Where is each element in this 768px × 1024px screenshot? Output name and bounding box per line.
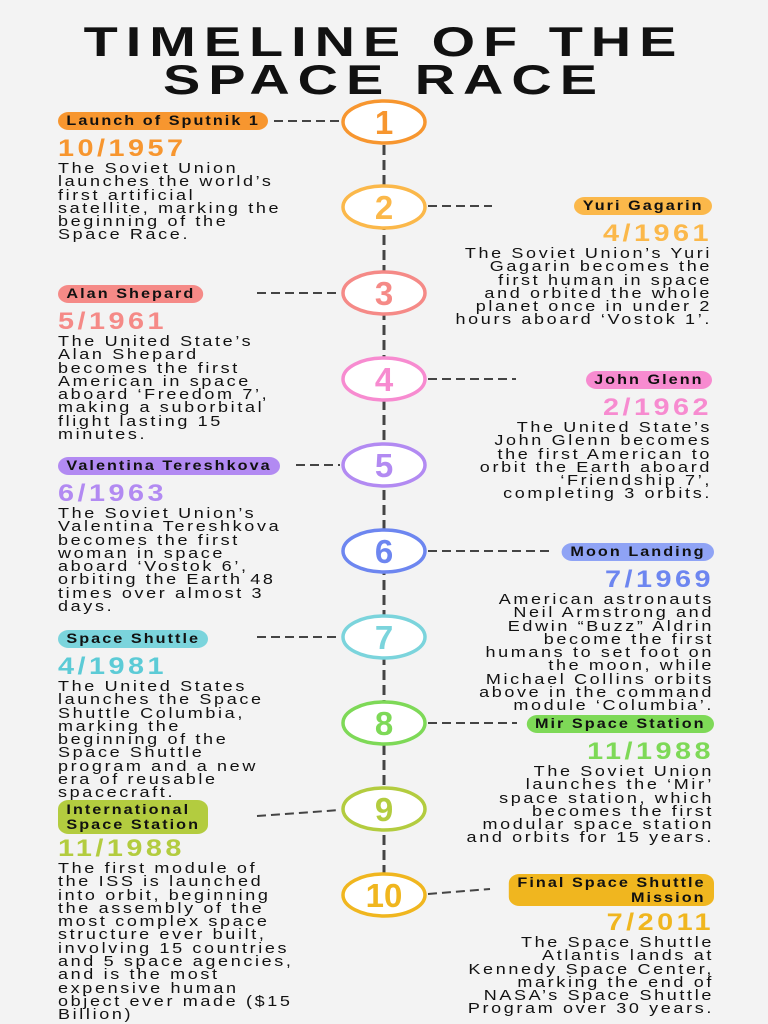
event 10: Kennedy Space Center,: [468, 961, 714, 978]
circles: 5: [375, 447, 393, 484]
event 7: beginning of the: [58, 731, 228, 748]
event 5: Valentina Tereshkova: [58, 518, 281, 535]
event 5: times over almost 3: [58, 585, 264, 602]
event 9: and is the most: [58, 966, 220, 983]
event 1: satellite, marking the: [58, 200, 281, 217]
event 9: most complex space: [58, 913, 270, 930]
circles: 9: [375, 791, 393, 828]
event 3: [58, 285, 269, 443]
event 8: space station, which: [499, 790, 714, 807]
event 4: completing 3 orbits.: [503, 485, 712, 502]
event 7: marking the: [58, 718, 181, 735]
event 9: and 5 space agencies,: [58, 953, 294, 970]
event 2: Gagarin becomes the: [490, 258, 712, 275]
event 6: become the first: [544, 631, 714, 648]
event 9: The first module of: [58, 860, 257, 877]
event 7: Shuttle Columbia,: [58, 705, 245, 722]
event 9: Billion): [58, 1006, 133, 1023]
event 2: 4/1961: [603, 220, 712, 247]
circles: 10: [366, 877, 402, 914]
event 10: marking the end of: [517, 974, 714, 991]
event 4: The United State’s: [517, 419, 712, 436]
event 6: Moon Landing: [570, 544, 706, 559]
event 2: hours aboard ‘Vostok 1’.: [456, 311, 712, 328]
event 10: Atlantis lands at: [542, 947, 714, 964]
event 6: above in the command: [479, 684, 714, 701]
event 1: Space Race.: [58, 226, 190, 243]
circles: [343, 101, 425, 916]
event 1: beginning of the: [58, 213, 228, 230]
event 4: the first American to: [497, 446, 712, 463]
circles: 2: [375, 189, 393, 226]
event 5: The Soviet Union’s: [58, 505, 256, 522]
event 2: Yuri Gagarin: [583, 198, 704, 213]
event 8: The Soviet Union: [534, 763, 714, 780]
event 4: John Glenn becomes: [494, 432, 712, 449]
event 9: International: [66, 802, 190, 817]
event 6: [479, 543, 714, 714]
event 3: Alan Shepard: [66, 286, 195, 301]
event 9: Space Station: [66, 817, 200, 832]
event 5: orbiting the Earth 48: [58, 571, 276, 588]
event 3: 5/1961: [58, 308, 167, 335]
event 7: spacecraft.: [58, 784, 175, 801]
circles: 4: [375, 361, 394, 398]
event 6: American astronauts: [499, 591, 714, 608]
event 9: involving 15 countries: [58, 940, 289, 957]
event 7: program and a new: [58, 758, 258, 775]
event 5: woman in space: [58, 545, 225, 562]
event 9: the assembly of the: [58, 900, 264, 917]
event 8: Mir Space Station: [535, 716, 706, 731]
event 1: Launch of Sputnik 1: [66, 113, 260, 128]
event 6: humans to set foot on: [485, 644, 714, 661]
event 3: minutes.: [58, 426, 147, 443]
event 2: The Soviet Union’s Yuri: [465, 245, 712, 262]
circles: 8: [375, 705, 393, 742]
event 10: Program over 30 years.: [468, 1000, 714, 1017]
event 5: days.: [58, 598, 114, 615]
event 3: American in space: [58, 373, 251, 390]
event 9: structure ever built,: [58, 926, 267, 943]
event 4: ‘Friendship 7’,: [560, 472, 712, 489]
title: TIMELINE OF THE: [84, 18, 684, 65]
event 1: [58, 112, 281, 243]
event 6: Neil Armstrong and: [513, 604, 714, 621]
event 9: expensive human: [58, 980, 239, 997]
event 7: Space Shuttle: [58, 744, 204, 761]
event 1: The Soviet Union: [58, 160, 238, 177]
event 4: orbit the Earth aboard: [480, 459, 712, 476]
event 7: launches the Space: [58, 691, 264, 708]
event 3: Alan Shepard: [58, 346, 199, 363]
event 7: era of reusable: [58, 771, 218, 788]
event 4: John Glenn: [594, 372, 704, 387]
event 7: Space Shuttle: [66, 631, 200, 646]
event 9: object ever made ($15: [58, 993, 293, 1010]
event 10: Mission: [631, 890, 706, 905]
event 6: Michael Collins orbits: [486, 671, 714, 688]
event 3: flight lasting 15: [58, 413, 223, 430]
event 9: 11/1988: [58, 835, 185, 862]
event 10: The Space Shuttle: [521, 934, 714, 951]
event 5: Valentina Tereshkova: [66, 458, 272, 473]
event 2: first human in space: [498, 272, 712, 289]
event 8: and orbits for 15 years.: [467, 829, 714, 846]
title: [84, 18, 684, 103]
circles: 1: [375, 104, 393, 141]
event 6: the moon, while: [548, 657, 714, 674]
event 5: becomes the first: [58, 532, 240, 549]
event 3: aboard ‘Freedom 7’,: [58, 386, 269, 403]
event 1: first artificial: [58, 187, 195, 204]
circles: 7: [375, 619, 393, 656]
event 1: launches the world’s: [58, 173, 274, 190]
event 2: and orbited the whole: [484, 285, 712, 302]
event 4: [480, 371, 712, 502]
event 6: module ‘Columbia’.: [513, 697, 714, 714]
event 2: planet once in under 2: [476, 298, 712, 315]
event 5: 6/1963: [58, 480, 167, 507]
event 3: making a suborbital: [58, 399, 264, 416]
event 5: [58, 457, 281, 615]
event 8: [467, 715, 714, 846]
event 7: [58, 630, 264, 801]
event 6: 7/1969: [605, 566, 714, 593]
event 2: [456, 197, 712, 328]
event 6: Edwin “Buzz” Aldrin: [508, 618, 714, 635]
event 10: 7/2011: [607, 909, 714, 936]
event 8: modular space station: [482, 816, 714, 833]
event 10: NASA’s Space Shuttle: [484, 987, 714, 1004]
event 10: Final Space Shuttle: [517, 875, 706, 890]
event 9: [58, 800, 294, 1023]
event 8: 11/1988: [587, 738, 714, 765]
event 4: 2/1962: [603, 394, 712, 421]
event 7: The United States: [58, 678, 247, 695]
event 5: aboard ‘Vostok 6’,: [58, 558, 249, 575]
event 3: The United State’s: [58, 333, 253, 350]
event 3: becomes the first: [58, 360, 240, 377]
circles: 6: [375, 533, 393, 570]
title: SPACE RACE: [163, 56, 605, 103]
event 1: 10/1957: [58, 135, 186, 162]
event 9: into orbit, beginning: [58, 887, 271, 904]
event 9: the ISS is launched: [58, 873, 263, 890]
circles: 3: [375, 275, 393, 312]
event 8: launches the ‘Mir’: [526, 776, 714, 793]
event 10: [468, 874, 714, 1017]
event 7: 4/1981: [58, 653, 167, 680]
event 8: becomes the first: [532, 803, 714, 820]
